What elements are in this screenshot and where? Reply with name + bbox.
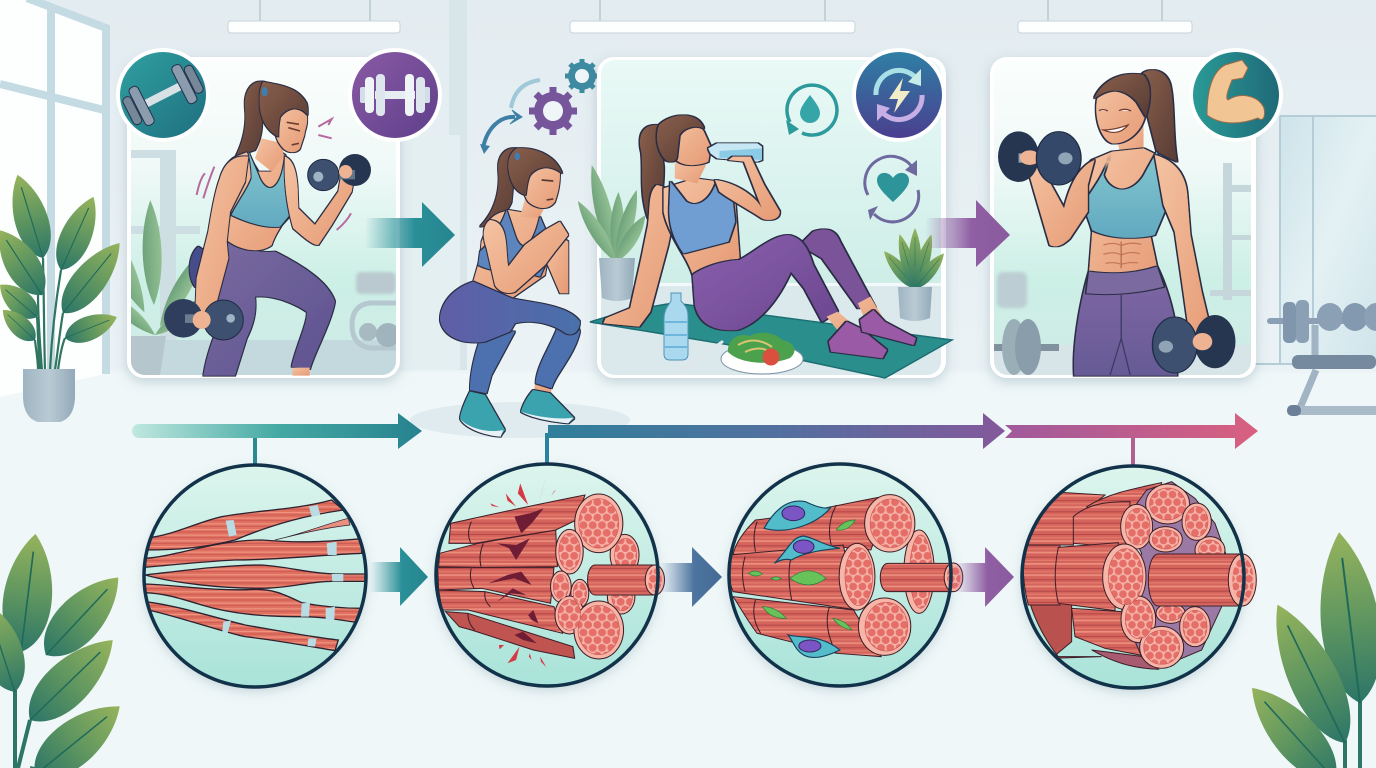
icon: water cycle — [786, 85, 837, 135]
lowered arm — [195, 156, 248, 328]
torso — [1084, 148, 1175, 273]
neck — [675, 158, 706, 183]
muscle circle 4: larger, stronger fibres — [1022, 466, 1256, 688]
near arm and clasped hands — [484, 220, 568, 293]
dumbbell lowered — [164, 299, 243, 340]
plant: bottom-right corner — [1235, 529, 1376, 768]
panel: stage 1 training — [89, 57, 400, 378]
icon: teal dumbbell badge — [116, 48, 210, 142]
raised arm — [715, 157, 780, 220]
neck — [255, 138, 283, 172]
regenerating green cells — [749, 520, 855, 630]
hair — [657, 115, 704, 162]
ponytail — [236, 82, 263, 157]
head — [523, 166, 560, 208]
torso — [222, 152, 297, 250]
torso — [473, 210, 548, 298]
plant: bottom-left corner — [0, 531, 135, 768]
torso — [664, 178, 740, 275]
central fibre — [588, 565, 665, 595]
hair band — [262, 87, 268, 96]
ab definition — [1103, 242, 1141, 268]
shoe back — [860, 310, 916, 345]
arrow: training to recovery — [365, 202, 455, 267]
dumbbell held up — [998, 131, 1081, 185]
muscle circle 3: satellite cell repair — [729, 464, 963, 686]
face details — [287, 122, 300, 145]
satellite cells — [764, 501, 840, 657]
plant: left big potted plant — [0, 170, 132, 422]
pain marks and motion lines — [197, 119, 351, 230]
far leg — [800, 229, 876, 308]
bundle cross-sections — [1103, 484, 1225, 668]
head — [665, 124, 711, 165]
ponytail — [1141, 70, 1177, 162]
dumbbell raised — [308, 154, 371, 191]
far forearm — [545, 235, 568, 293]
central fibre — [1148, 554, 1256, 606]
muscle circle 1: healthy fibres — [144, 465, 366, 687]
panel: stage 2 recovery — [597, 57, 946, 378]
shoe left — [460, 392, 505, 437]
leg seam — [1110, 295, 1130, 375]
fibre bundles — [1023, 483, 1162, 669]
window on the left wall — [0, 0, 110, 397]
shoe right — [521, 390, 574, 423]
fibre bands — [222, 505, 343, 647]
fibre strands — [145, 500, 365, 651]
icon: purple dumbbell badge — [348, 48, 442, 142]
sports bra — [1083, 152, 1166, 238]
lowered arm — [1155, 155, 1213, 352]
bracing arm — [603, 185, 675, 327]
ankles — [468, 382, 552, 398]
timeline arrow: third stage — [1005, 413, 1258, 465]
water bottle on mat — [664, 293, 688, 360]
arrow: recovery to growth — [925, 200, 1010, 267]
shoe front — [829, 322, 887, 358]
smile and eyes — [1099, 109, 1131, 132]
sports bra — [478, 210, 548, 277]
bundle cross-sections — [839, 495, 934, 655]
hair — [508, 148, 562, 195]
ponytail — [640, 125, 664, 218]
leggings — [198, 240, 335, 376]
raised arm — [285, 157, 355, 245]
head — [1096, 84, 1146, 143]
hair — [1094, 74, 1150, 117]
sports bra — [232, 152, 297, 227]
neck — [520, 193, 547, 218]
glutes — [190, 247, 215, 295]
waistband — [1086, 267, 1164, 294]
icon: cycling gears and arrows — [480, 59, 599, 154]
exercise mat — [590, 303, 952, 378]
central fibre — [880, 563, 963, 592]
timeline arrow: first stage — [132, 413, 422, 465]
ankle — [292, 368, 310, 376]
shins — [470, 323, 580, 393]
connective tissue — [1122, 482, 1226, 668]
bottle at lips — [708, 143, 762, 162]
leggings — [1074, 267, 1177, 376]
plate with salad — [680, 333, 803, 374]
sports bra — [669, 180, 735, 253]
ponytail — [480, 148, 517, 227]
icon: heart recovery cycle — [865, 156, 919, 222]
face details — [542, 180, 553, 200]
neck — [1117, 125, 1144, 158]
tear marks — [489, 508, 544, 643]
ankles — [827, 297, 882, 333]
torn fragments — [490, 478, 556, 667]
gym bench with barbell at right — [1267, 300, 1376, 416]
timeline arrow: second stage — [545, 413, 1005, 465]
hair band — [515, 152, 520, 160]
bundle cross-sections — [551, 494, 639, 659]
hair — [260, 82, 308, 137]
panel: stage 3 stronger muscle — [990, 57, 1256, 378]
icon: energy cycle badge — [852, 48, 946, 142]
lifting arm — [1025, 158, 1094, 246]
glass partition on the right wall — [1255, 116, 1376, 364]
plant: in recovery panel — [572, 163, 949, 321]
dumbbell lowered — [1152, 315, 1235, 373]
fibre bundles — [729, 495, 891, 657]
figure: woman squatting — [440, 148, 580, 437]
icon: flexed bicep badge — [1189, 48, 1283, 142]
figure: woman resting and drinking — [603, 115, 916, 358]
torn fibre bundles — [438, 495, 585, 658]
arrow: tears to repair — [660, 547, 722, 607]
figure: strong woman smiling with dumbbells — [998, 70, 1235, 376]
ceiling lights — [228, 0, 1192, 33]
arrow: repair to growth — [955, 547, 1014, 607]
head — [274, 106, 307, 152]
arrow: fibres to micro-tears — [370, 547, 428, 606]
near leg and hips — [693, 235, 838, 330]
figure: woman lifting with strain — [164, 82, 371, 376]
muscle circle 2: micro-tears — [436, 464, 665, 686]
hips and thighs — [440, 282, 580, 342]
